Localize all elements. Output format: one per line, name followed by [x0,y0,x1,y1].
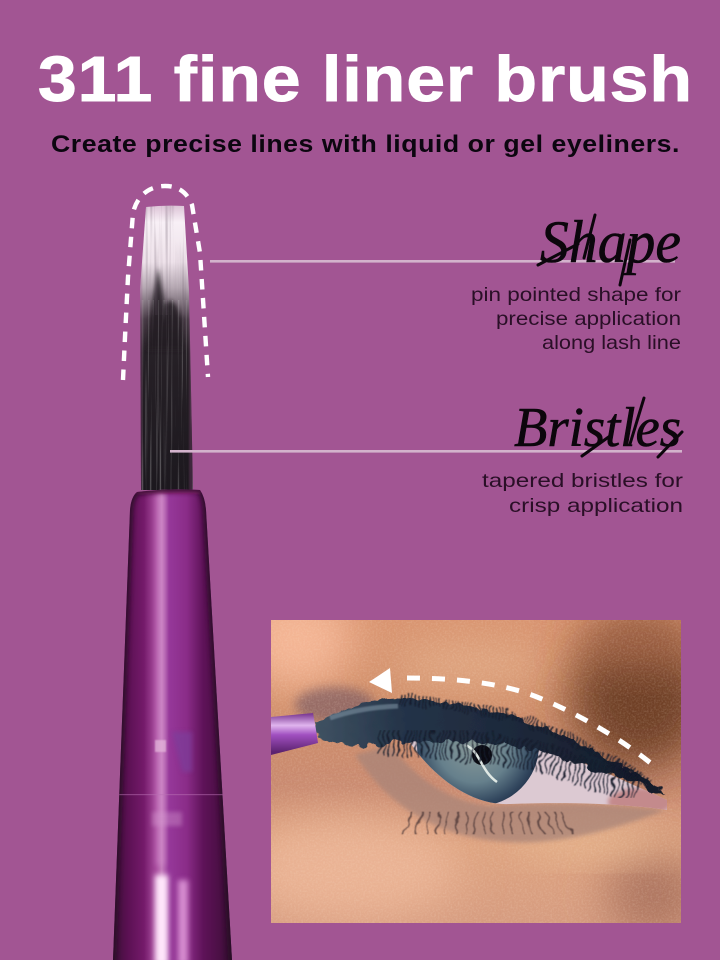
bristles description [482,470,684,517]
shape brush swashes [538,215,630,285]
bristles leader line [170,450,682,453]
applicator brush ferrule [271,713,318,755]
shape heading: Shape [540,209,681,275]
shape description: precise application [496,308,681,330]
bristles heading: Bristles [514,397,681,459]
brush bristles [140,206,193,490]
callout: shape [210,209,682,354]
dashed shape outline [123,186,208,380]
callout: bristles [170,397,684,517]
title: 311 fine liner brush [38,43,693,115]
bristles brush swashes [582,398,682,457]
eyeball [410,739,667,810]
skin tones [271,620,681,923]
subtitle: Create precise lines with liquid or gel eyeliners. [51,131,680,158]
shape leader line [210,260,675,263]
bristles description: tapered bristles for [482,470,684,492]
bristles description: crisp application [509,495,683,517]
eye application photo [271,620,681,923]
eyeliner and upper lashes [316,698,667,795]
shape description [471,284,682,354]
dashed arrow [369,668,653,765]
lower lid [355,745,665,842]
brush handle [110,486,235,960]
brush illustration [110,200,235,960]
lower lashes [410,815,570,831]
shape description: pin pointed shape for [471,284,682,306]
shape description: along lash line [542,332,681,354]
